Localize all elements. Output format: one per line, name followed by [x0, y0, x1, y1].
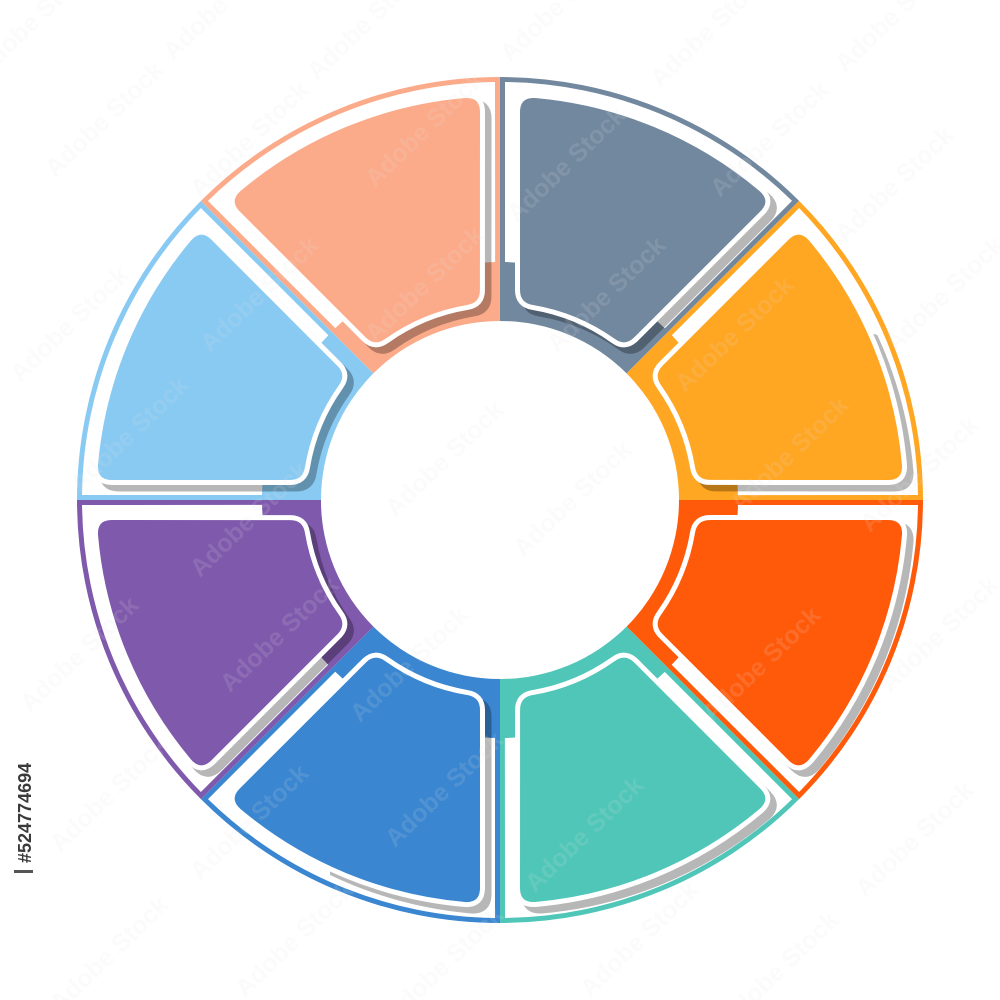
stock watermark: Adobe Stock [520, 771, 649, 897]
stock watermark: Adobe Stock [215, 571, 344, 697]
segment 7: light blue [77, 201, 373, 500]
stock watermark: Adobe Stock [502, 101, 631, 227]
stock watermark: Adobe Stock [185, 76, 314, 202]
stock watermark: Adobe Stock [508, 436, 637, 562]
stock watermark: Adobe Stock [40, 56, 169, 182]
stock watermark: Adobe Stock [65, 371, 194, 497]
stock watermark: Adobe Stock [5, 261, 134, 387]
stock watermark: Adobe Stock [855, 411, 984, 537]
stock watermark: Adobe Stock [185, 456, 314, 582]
stock watermark: Adobe Stock [15, 591, 144, 717]
stock watermark: Adobe Stock [45, 731, 174, 857]
stock watermark: Adobe Stock [380, 396, 509, 522]
stock watermark: Adobe Stock [705, 76, 834, 202]
segment 8: peach [201, 0, 622, 410]
stock watermark: Adobe Stock [697, 601, 826, 727]
stock watermark: Adobe Stock [725, 391, 854, 517]
stock watermark: Adobe Stock [185, 759, 314, 885]
stock watermark: Adobe Stock [830, 121, 959, 247]
image id: #524774694 [15, 763, 35, 863]
segment 3: red-orange [627, 500, 923, 799]
stock watermark: Adobe Stock [360, 221, 489, 347]
infographic: eight segment ring [14, 77, 923, 923]
segment 1: slate [500, 77, 799, 373]
segment 6: purple [0, 378, 410, 799]
segment 5: blue [201, 627, 500, 923]
id separator [14, 870, 33, 873]
stock watermark: Adobe Stock [345, 601, 474, 727]
stock watermark: Adobe Stock [850, 776, 979, 902]
stock watermark: Adobe Stock [575, 876, 704, 1000]
stock watermark: Adobe Stock [380, 726, 509, 852]
stock watermark: Adobe Stock [195, 231, 324, 357]
stock watermark: Adobe Stock [670, 271, 799, 397]
stock watermark: Adobe Stock [360, 66, 489, 192]
segment 2: orange [626, 200, 923, 500]
segment 4: teal [378, 590, 799, 1000]
stock watermark: Adobe Stock [230, 876, 359, 1000]
stock watermark: Adobe Stock [542, 231, 671, 357]
